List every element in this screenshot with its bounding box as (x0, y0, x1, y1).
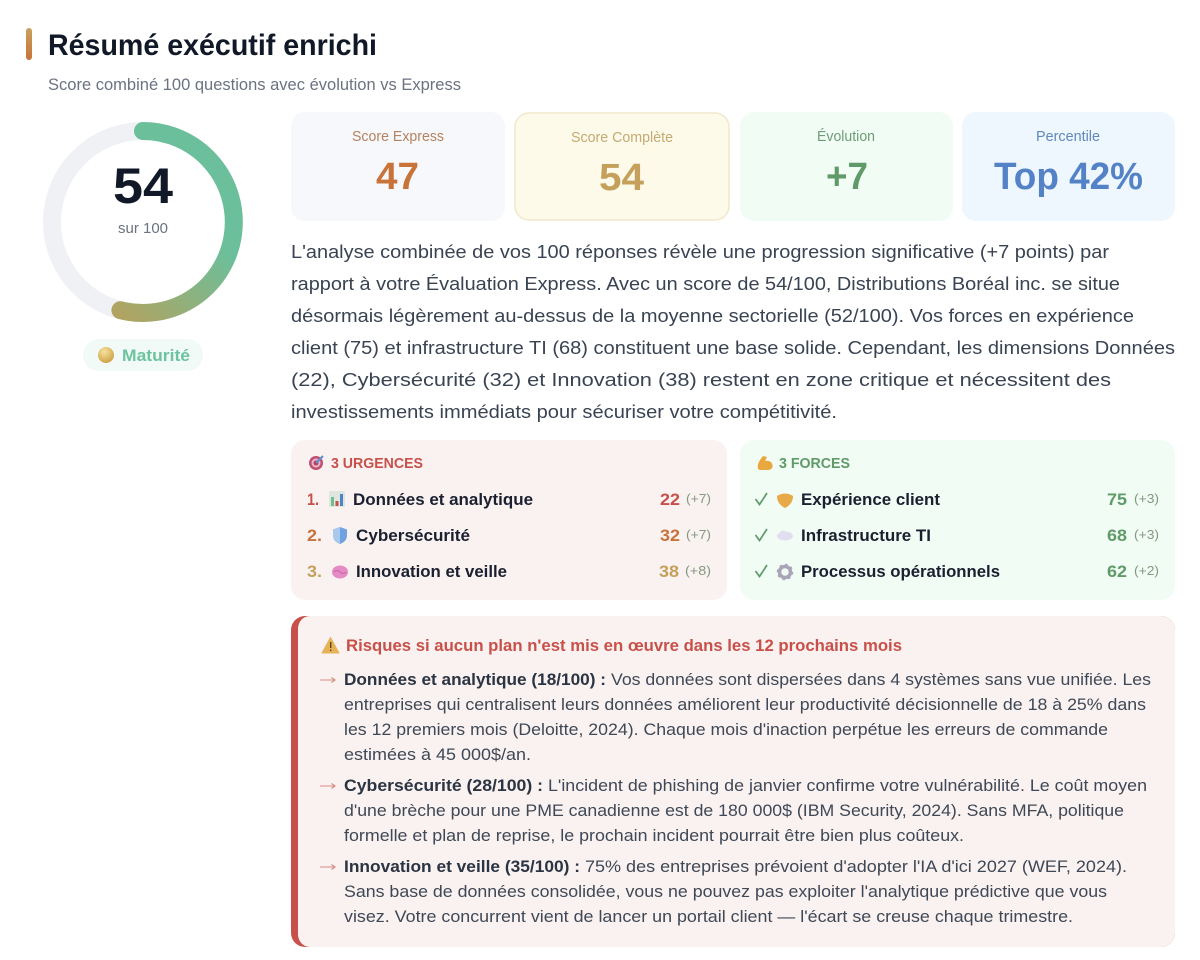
summary paragraph (291, 241, 1175, 422)
row: innovation: 3. (307, 563, 322, 581)
summary paragraph: désormais légèrement au-dessus de la moyenne sectorielle (52/100). Vos forces en expérience (291, 305, 1134, 326)
risk: innovation: Innovation et veille (35/100) : (344, 858, 580, 876)
row: donnees: Données et analytique (353, 490, 533, 509)
card: evolution: Évolution (817, 128, 875, 145)
risk: cybersecurite: L'incident de phishing de janvier confirme votre vulnérabilité. Le coût moyen (548, 777, 1147, 795)
title accent bar (26, 28, 32, 60)
risk: donnees: les 12 premiers mois (Deloitte, 2024). Chaque mois d'inaction perpétue les erreurs de commande (344, 721, 1108, 739)
risk: cybersecurite: formelle et plan de reprise, le prochain incident pourrait être bien plus coûteux. (344, 827, 964, 845)
risk: innovation: 75% des entreprises prévoient d'adopter l'IA d'ici 2027 (WEF, 2024). (585, 858, 1127, 876)
panel: forces (740, 440, 1175, 600)
score gauge (52, 131, 234, 313)
summary paragraph: L'analyse combinée de vos 100 réponses révèle une progression significative (+7 points) par (291, 241, 1109, 262)
card: score complete (515, 113, 729, 220)
row: experience client: (+3) (1134, 491, 1159, 506)
row: processus: (+2) (1134, 563, 1159, 578)
risk: donnees: Données et analytique (18/100) : (344, 671, 606, 689)
risk: cybersecurite: Cybersécurité (28/100) : (344, 777, 543, 795)
subtitle: Score combiné 100 questions avec évolution vs Express (48, 76, 461, 94)
maturity badge (83, 339, 203, 371)
row: donnees (307, 490, 711, 509)
score gauge: 54 (113, 158, 173, 214)
row: donnees: 1. (307, 491, 319, 509)
card: percentile (962, 112, 1175, 221)
row: cybersecurite: Cybersécurité (356, 526, 470, 545)
risk: innovation: Sans base de données consolidée, vous ne pouvez pas exploiter l'analytique prédictive que vous (344, 883, 1107, 901)
row: cybersecurite: 2. (307, 527, 322, 545)
card: score complete: Score Complète (571, 130, 673, 146)
card: evolution: +7 (826, 156, 868, 198)
title: Résumé exécutif enrichi (48, 29, 377, 62)
row: infrastructure (756, 526, 1159, 545)
row: cybersecurite (307, 526, 711, 545)
risk: cybersecurite: d'une brèche pour une PME canadienne est de 180 000$ (IBM Security, 2024). Sans MFA, politique (344, 802, 1124, 820)
risk: donnees: estimées à 45 000$/an. (344, 746, 531, 764)
row: cybersecurite: (+7) (686, 527, 711, 542)
summary paragraph: (22), Cybersécurité (32) et Innovation (38) restent en zone critique et nécessitent des (291, 369, 1111, 390)
card: percentile: Top 42% (994, 156, 1143, 198)
heading: forces: 3 FORCES (779, 456, 850, 472)
row: infrastructure: Infrastructure TI (801, 526, 931, 545)
icon: warning (322, 638, 339, 653)
risk: donnees (320, 671, 1151, 764)
heading: risques: Risques si aucun plan n'est mis en œuvre dans les 12 prochains mois (346, 637, 902, 655)
row: donnees: (+7) (686, 491, 711, 506)
card: score express: 47 (376, 156, 419, 198)
row: innovation: (+8) (685, 563, 711, 578)
row: processus (756, 562, 1159, 581)
row: donnees: 22 (660, 490, 680, 509)
row: processus: Processus opérationnels (801, 562, 1000, 581)
card: percentile: Percentile (1036, 129, 1100, 145)
card: evolution (740, 112, 953, 221)
risk: innovation: visez. Votre concurrent vient de lancer un portail client — l'écart se creuse chaque trimestre. (344, 908, 1073, 926)
panel: urgences (291, 440, 727, 600)
row: experience client: 75 (1107, 490, 1127, 509)
risk: donnees: entreprises qui centralisent leurs données améliorent leur productivité décisionnelle de 18 à 25% dans (344, 696, 1146, 714)
row: cybersecurite: 32 (660, 526, 680, 545)
maturity badge: Maturité (122, 347, 190, 365)
row: infrastructure: (+3) (1134, 527, 1159, 542)
card: score complete: 54 (599, 157, 644, 199)
risk: donnees: Vos données sont dispersées dans 4 systèmes sans vue unifiée. Les (611, 671, 1151, 689)
summary paragraph: investissements immédiats pour sécuriser votre compétitivité. (291, 401, 837, 422)
icon: muscle (758, 456, 773, 470)
score gauge: sur 100 (118, 220, 168, 237)
risk: innovation (320, 858, 1127, 926)
summary paragraph: client (75) et infrastructure TI (68) constituent une base solide. Cependant, les dimensions Données (291, 337, 1175, 358)
card: score express: Score Express (352, 129, 444, 145)
row: experience client (756, 490, 1159, 509)
row: innovation: Innovation et veille (356, 562, 507, 581)
heading: urgences: 3 URGENCES (331, 456, 423, 472)
row: experience client: Expérience client (801, 490, 940, 509)
card: score express (291, 112, 505, 221)
summary paragraph: rapport à votre Évaluation Express. Avec un score de 54/100, Distributions Boréal inc. se situe (291, 273, 1120, 294)
row: innovation: 38 (659, 562, 679, 581)
panel: risques (291, 616, 1175, 947)
risk: cybersecurite (320, 777, 1147, 845)
row: innovation (307, 562, 711, 581)
icon: target (309, 456, 323, 470)
row: infrastructure: 68 (1107, 526, 1127, 545)
row: processus: 62 (1107, 562, 1127, 581)
